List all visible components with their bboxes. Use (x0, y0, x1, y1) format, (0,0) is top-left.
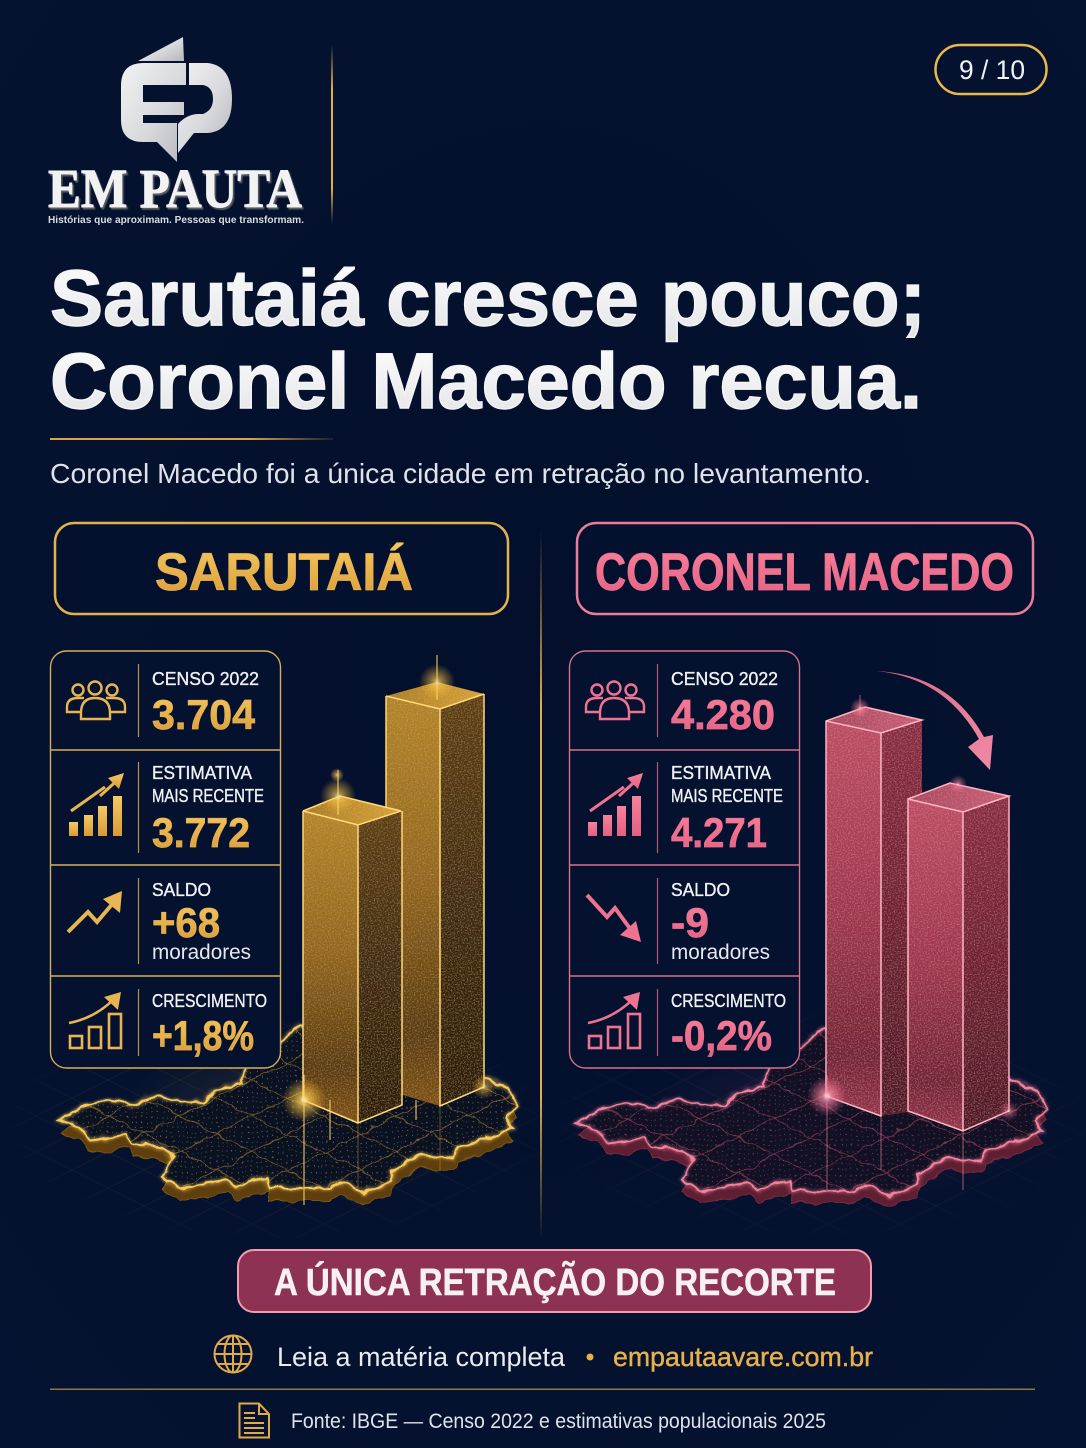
row: estimativa: ESTIMATIVA (152, 763, 252, 783)
icon: EP speech-bubble mark (121, 37, 232, 162)
row: censo 2022: CENSO 2022 (152, 669, 259, 689)
title (50, 253, 926, 425)
page badge: 9 / 10 (959, 55, 1025, 85)
logo: Em Pauta (48, 37, 304, 226)
row: saldo (587, 880, 770, 964)
row: censo 2022: CENSO 2022 (671, 669, 778, 689)
row: crescimento (69, 991, 267, 1059)
read more text: Leia a matéria completa (277, 1342, 566, 1372)
arrow: downward curve (877, 671, 993, 770)
row: estimativa: MAIS RECENTE (671, 786, 783, 806)
website: empautaavare.com.br (613, 1342, 873, 1372)
icon: outlined bars with arrow (588, 992, 640, 1048)
row: estimativa: MAIS RECENTE (152, 786, 264, 806)
icon: bars with arrow (69, 773, 124, 836)
pink sparkles (807, 695, 1019, 1190)
icon: document (240, 1404, 269, 1438)
icon: people (586, 682, 644, 719)
logo wordmark: EM PAUTA (48, 158, 302, 219)
center divider (540, 530, 542, 1240)
gold sparkles (282, 655, 496, 1205)
icon: trend down (587, 895, 641, 942)
row: saldo: SALDO (152, 880, 211, 900)
source: Fonte: IBGE — Censo 2022 e estimativas populacionais 2025 (291, 1410, 826, 1433)
title rule (50, 438, 333, 440)
row: estimativa: 4.271 (671, 809, 767, 856)
icon: bars with arrow (588, 773, 643, 836)
row: censo 2022 (586, 669, 778, 738)
icon: globe (214, 1336, 252, 1372)
panel: Sarutaiá stats (50, 651, 280, 1068)
chart: Coronel Macedo map and pink bars (545, 671, 1086, 1260)
row: censo 2022: 3.704 (152, 691, 256, 738)
footer rule (50, 1388, 1035, 1390)
row: saldo (68, 880, 251, 964)
heading: Sarutaiá (55, 523, 508, 614)
source (240, 1404, 826, 1438)
map: gold region (30, 1019, 530, 1233)
logo tagline: Histórias que aproximam. Pessoas que transformam. (48, 214, 304, 226)
bar: short pink (908, 783, 1009, 1131)
row: crescimento: -0,2% (671, 1012, 772, 1059)
row: censo 2022 (67, 669, 259, 738)
row: estimativa: ESTIMATIVA (671, 763, 771, 783)
row: crescimento (588, 991, 786, 1059)
icon: trend up (68, 891, 122, 932)
icon: people (67, 682, 125, 719)
title: Coronel Macedo recua. (50, 336, 922, 425)
callout: A ÚNICA RETRAÇÃO DO RECORTE (274, 1260, 836, 1304)
row: crescimento: +1,8% (152, 1012, 254, 1059)
row: saldo: SALDO (671, 880, 730, 900)
row: saldo: moradores (671, 941, 770, 964)
subtitle: Coronel Macedo foi a única cidade em retração no levantamento. (50, 458, 871, 489)
heading: Coronel Macedo (577, 523, 1033, 614)
bar: tall gold (386, 682, 484, 1106)
panel: Coronel Macedo stats (570, 651, 800, 1068)
heading: Sarutaiá: SARUTAIÁ (155, 542, 413, 602)
row: saldo: -9 (671, 899, 709, 946)
row: estimativa (69, 763, 264, 856)
call to action (214, 1336, 873, 1372)
bar: short gold (303, 796, 402, 1123)
logo divider (331, 44, 333, 224)
row: estimativa: 3.772 (152, 809, 250, 856)
bar: tall pink (826, 707, 922, 1116)
row: censo 2022: 4.280 (671, 691, 775, 738)
row: estimativa (588, 763, 783, 856)
row: crescimento: CRESCIMENTO (152, 991, 267, 1011)
icon: outlined bars with arrow (69, 992, 121, 1048)
callout (238, 1250, 871, 1312)
page badge (936, 45, 1046, 94)
row: saldo: +68 (152, 899, 220, 946)
map: pink region (566, 1017, 1065, 1233)
row: saldo: moradores (152, 941, 251, 964)
row: crescimento: CRESCIMENTO (671, 991, 786, 1011)
title: Sarutaiá cresce pouco; (50, 253, 926, 342)
chart: Sarutaiá map and gold bars (0, 655, 540, 1260)
